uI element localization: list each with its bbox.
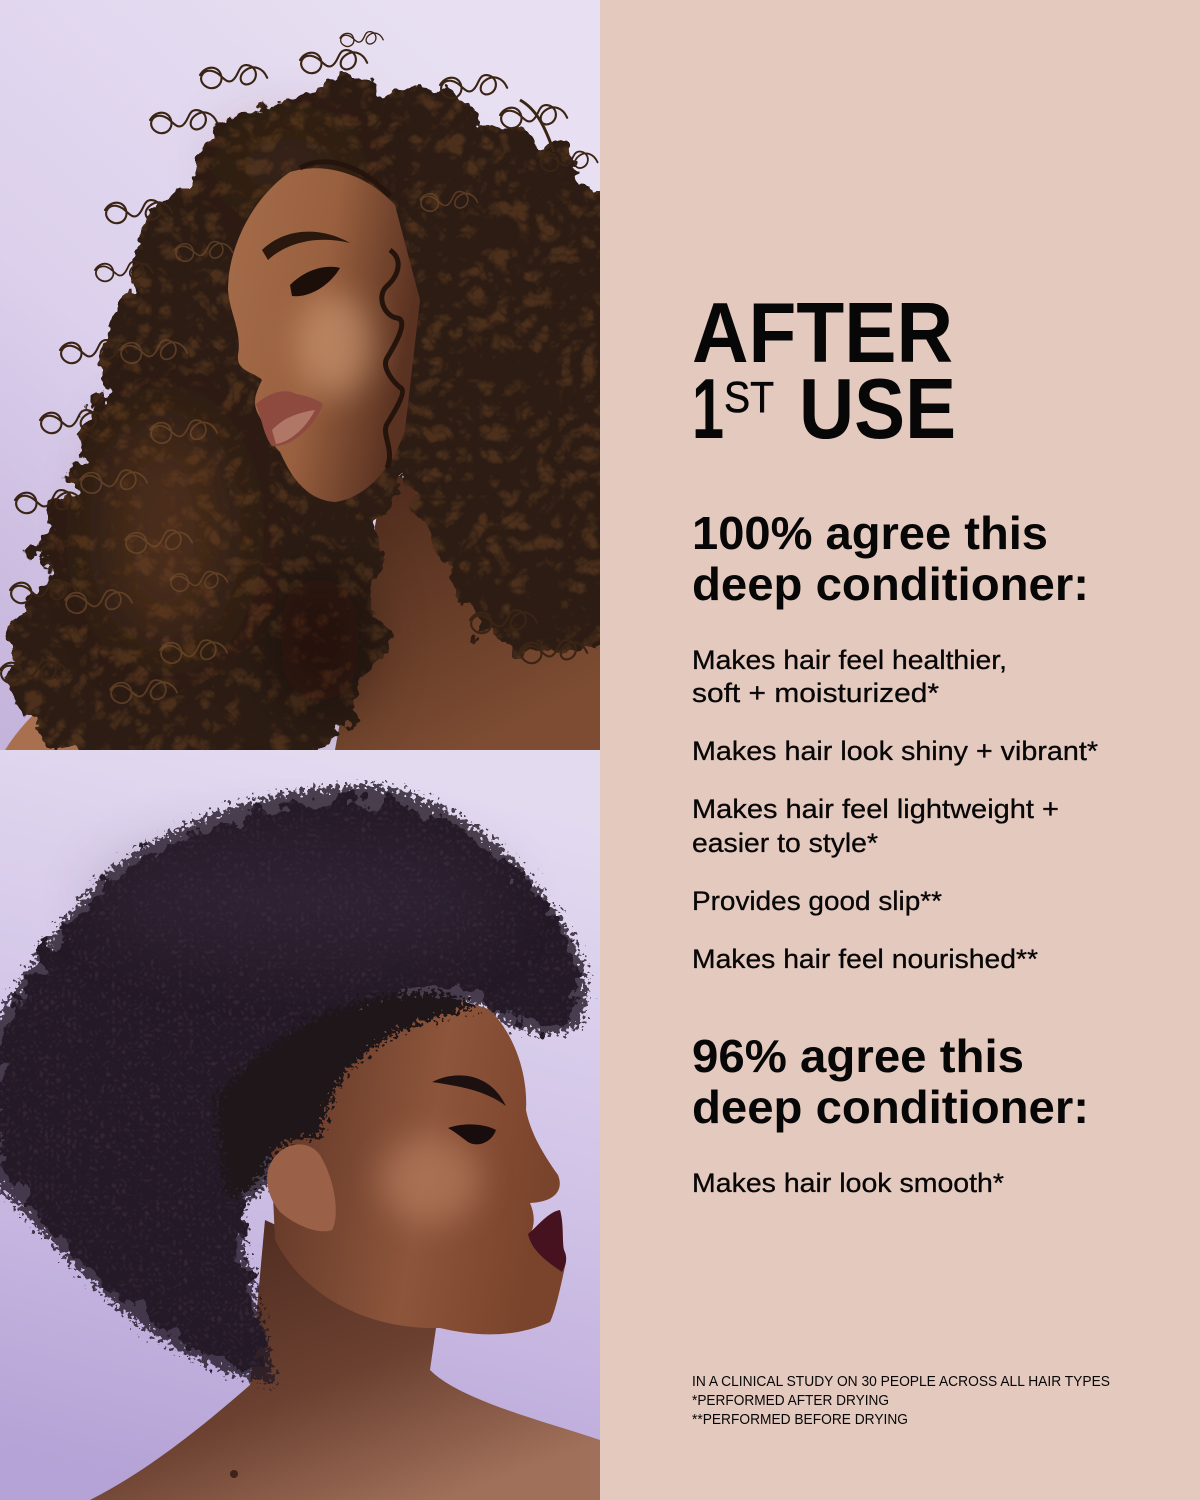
afro fuzz edge bbox=[0, 785, 587, 1385]
footnotes bbox=[692, 1374, 1110, 1428]
heading: 96% agree: 96% agree this bbox=[692, 1030, 1024, 1082]
golden curls bbox=[65, 192, 478, 703]
heading: 96% agree bbox=[692, 1030, 1089, 1133]
list: 100% claims: Makes hair look shiny + vibrant* bbox=[692, 736, 1099, 766]
photo background bbox=[0, 750, 600, 1500]
list: 96% claim: Makes hair look smooth* bbox=[692, 1168, 1005, 1198]
face bbox=[270, 1002, 566, 1334]
lips bbox=[256, 391, 323, 446]
list: 100% claims: Provides good slip** bbox=[692, 886, 942, 916]
hair strands over face edge bbox=[300, 162, 402, 468]
list: 100% claims: Makes hair feel healthier, bbox=[692, 645, 1007, 675]
curly hair mass bbox=[5, 80, 620, 770]
title line 1: AFTER bbox=[692, 286, 953, 381]
mole bbox=[230, 1470, 238, 1478]
loose dark curls at hair edge bbox=[0, 32, 598, 683]
list: 100% claims: Makes hair feel lightweight + bbox=[692, 794, 1059, 824]
heading: 100% agree: 100% agree this bbox=[692, 507, 1048, 559]
panel: bottom photo of woman with afro bbox=[0, 750, 600, 1500]
list: 100% claims: Makes hair feel nourished** bbox=[692, 944, 1039, 974]
list: 100% claims: easier to style* bbox=[692, 828, 879, 858]
eyebrow bbox=[262, 232, 350, 260]
footnotes: **PERFORMED BEFORE DRYING bbox=[692, 1412, 908, 1428]
face bbox=[228, 168, 420, 502]
title line 2: USE bbox=[799, 362, 956, 457]
lips bbox=[528, 1210, 566, 1272]
heading: 96% agree: deep conditioner: bbox=[692, 1081, 1089, 1133]
list: 100% claims: soft + moisturized* bbox=[692, 678, 940, 708]
neck and chest bbox=[335, 470, 600, 750]
afro hair bbox=[0, 800, 577, 1375]
title line 2: 1 bbox=[692, 362, 724, 457]
footnotes: *PERFORMED AFTER DRYING bbox=[692, 1393, 889, 1409]
ear bbox=[267, 1144, 336, 1231]
title line 2 bbox=[692, 362, 956, 457]
list: 100% claims bbox=[692, 645, 1099, 974]
title bbox=[692, 286, 956, 457]
panel: right background bbox=[600, 0, 1200, 1500]
footnotes: IN A CLINICAL STUDY ON 30 PEOPLE ACROSS ALL HAIR TYPES bbox=[692, 1374, 1110, 1390]
heading: 100% agree bbox=[692, 507, 1089, 610]
afro soft highlight bbox=[100, 845, 500, 955]
title line 2: ST bbox=[724, 373, 774, 422]
eyebrow bbox=[432, 1075, 506, 1106]
cheek highlight bbox=[380, 1136, 480, 1224]
short hair at hairline bbox=[215, 992, 478, 1196]
neck and shoulders bbox=[90, 1220, 600, 1500]
hair highlights bbox=[110, 135, 360, 710]
shoulder left bbox=[5, 716, 79, 750]
eye bbox=[290, 267, 340, 296]
cheek highlight bbox=[297, 293, 373, 397]
heading: 100% agree: deep conditioner: bbox=[692, 558, 1089, 610]
panel: top photo of woman with curly hair bbox=[0, 0, 620, 770]
photo background bbox=[0, 0, 600, 750]
eye bbox=[448, 1124, 496, 1144]
